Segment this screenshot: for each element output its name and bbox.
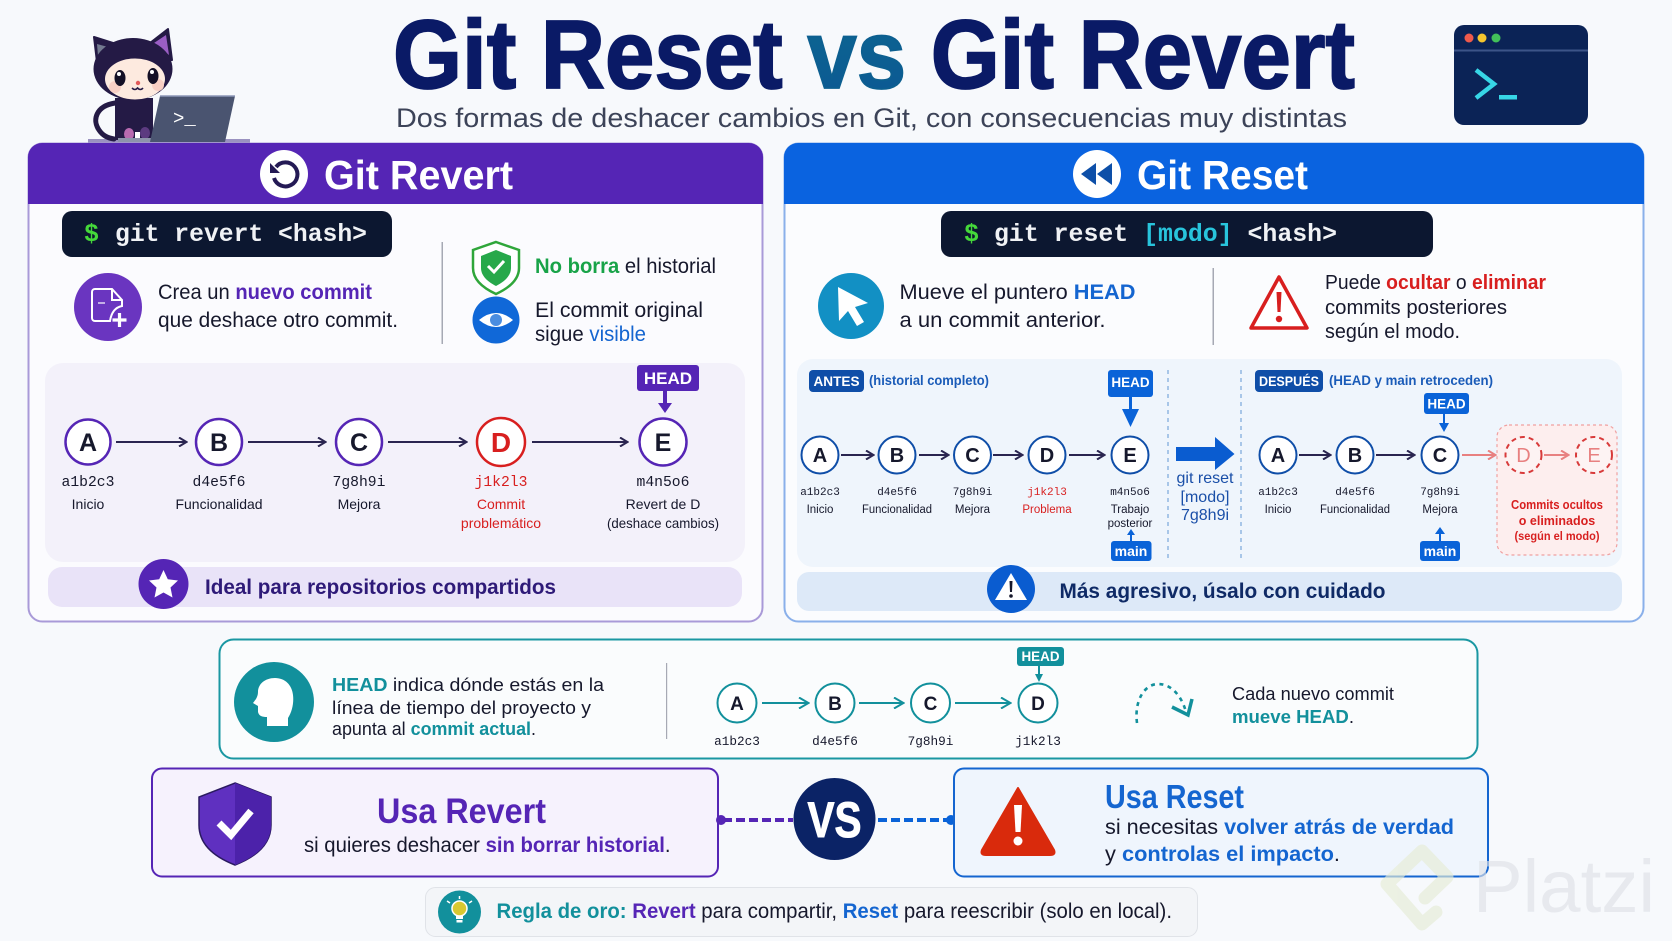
pointer: main before: main bbox=[1115, 543, 1147, 559]
commit A: a1b2c3 bbox=[62, 475, 114, 491]
commit C: C bbox=[350, 429, 368, 457]
callout: mas agresivo: Más agresivo, úsalo con cuidado bbox=[1060, 580, 1386, 603]
commit A before: Inicio bbox=[807, 504, 833, 516]
commit B after: Funcionalidad bbox=[1320, 504, 1390, 516]
label: despues: DESPUÉS bbox=[1259, 373, 1319, 389]
text: nuevo commit bbox=[158, 280, 398, 332]
pointer: HEAD after: HEAD bbox=[1427, 396, 1466, 412]
commit D: j1k2l3 bbox=[1015, 734, 1061, 749]
commit A: Inicio bbox=[72, 496, 105, 512]
connector: versus: VS bbox=[808, 792, 862, 848]
commit A after: A bbox=[1271, 445, 1285, 467]
commit C before: Mejora bbox=[955, 504, 991, 516]
callout: ideal para repositorios compartidos: Ideal para repositorios compartidos bbox=[205, 576, 556, 599]
commit C: C bbox=[924, 694, 938, 715]
label: despues bbox=[1255, 370, 1493, 392]
panel: hidden commits bbox=[1497, 425, 1617, 555]
commit E: m4n5o6 bbox=[637, 475, 689, 491]
commit D: D bbox=[1031, 694, 1045, 715]
commit B: d4e5f6 bbox=[812, 734, 858, 749]
label: antes: ANTES bbox=[814, 373, 860, 389]
text: HEAD definition: HEAD indica dónde estás en la bbox=[332, 674, 605, 695]
icon: terminal window bbox=[1454, 25, 1588, 125]
text: ocultar o eliminar bbox=[1325, 271, 1546, 343]
watermark: Platzi bbox=[1387, 845, 1655, 928]
text: volver atras: si necesitas volver atrás de verdad bbox=[1105, 816, 1454, 839]
pointer: main after bbox=[1420, 527, 1460, 561]
commit E before: Trabajo bbox=[1111, 504, 1149, 516]
text: HEAD definition: apunta al commit actual. bbox=[332, 718, 536, 739]
panel header: git revert: Git Revert bbox=[324, 152, 513, 198]
panel: usa revert bbox=[152, 768, 718, 876]
icon: green shield bbox=[473, 242, 519, 294]
icon: light bulb bbox=[438, 890, 481, 934]
icon: red warning bbox=[982, 788, 1054, 855]
pointer: HEAD before bbox=[1108, 370, 1153, 427]
timeline: reset before and after bbox=[797, 359, 1622, 567]
icon: new file bbox=[74, 273, 142, 341]
panel: git reset bbox=[784, 143, 1644, 622]
commit A before: A bbox=[813, 445, 827, 467]
commit E: Revert de D bbox=[626, 496, 700, 512]
pointer: HEAD bbox=[637, 365, 699, 413]
commit E before: m4n5o6 bbox=[1110, 487, 1150, 499]
commit C before: C bbox=[965, 445, 980, 467]
commit A: A bbox=[730, 694, 744, 715]
commit B after: d4e5f6 bbox=[1335, 487, 1375, 499]
text: cada nuevo commit bbox=[1232, 683, 1394, 727]
panel: HEAD explanation bbox=[220, 640, 1478, 758]
callout: regla de oro bbox=[426, 888, 1198, 936]
panel: hidden commits: D bbox=[1516, 445, 1531, 467]
text: mueve HEAD bbox=[900, 280, 1136, 332]
commit B after bbox=[1320, 436, 1390, 516]
commit C: Mejora bbox=[338, 496, 381, 512]
commit C after: 7g8h9i bbox=[1420, 487, 1460, 499]
callout: ideal para repositorios compartidos bbox=[48, 559, 742, 609]
icon: eye bbox=[472, 296, 520, 344]
arrow: git reset: git reset bbox=[1177, 470, 1234, 487]
commit C before: 7g8h9i bbox=[953, 487, 993, 499]
panel header: git reset bbox=[784, 143, 1644, 204]
commit C after: C bbox=[1433, 445, 1447, 467]
commit D before bbox=[1022, 436, 1072, 516]
commit B: d4e5f6 bbox=[193, 475, 245, 491]
commit D before: D bbox=[1040, 445, 1054, 467]
command: git revert: git revert <hash> bbox=[115, 220, 367, 249]
commit B: B bbox=[828, 694, 842, 715]
panel: hidden commits: o eliminados bbox=[1519, 514, 1595, 528]
connector: versus bbox=[716, 778, 956, 860]
pointer: HEAD: HEAD bbox=[1022, 648, 1060, 664]
panel: hidden commits: Commits ocultos bbox=[1511, 498, 1603, 512]
commit B: Funcionalidad bbox=[176, 496, 262, 512]
commit A before: a1b2c3 bbox=[800, 487, 840, 499]
pointer: main after: main bbox=[1424, 543, 1456, 559]
commit E before: posterior bbox=[1108, 518, 1153, 530]
commit B before: Funcionalidad bbox=[862, 504, 932, 516]
text: cada nuevo commit: Cada nuevo commit bbox=[1232, 683, 1394, 704]
commit C before bbox=[953, 436, 993, 516]
commit D bbox=[1015, 684, 1061, 749]
panel header: git revert bbox=[28, 143, 763, 204]
commit B before: d4e5f6 bbox=[877, 487, 917, 499]
label: antes bbox=[809, 370, 989, 392]
arrow: git reset bbox=[1176, 437, 1234, 524]
timeline: HEAD moves bbox=[714, 647, 1064, 749]
command: git revert bbox=[62, 211, 392, 257]
panel header: git reset: Git Reset bbox=[1137, 152, 1308, 198]
label: antes: (historial completo) bbox=[869, 373, 989, 388]
pointer: HEAD after bbox=[1424, 393, 1469, 432]
commit C bbox=[333, 419, 386, 512]
commit A before bbox=[800, 436, 840, 516]
callout: regla de oro: Regla de oro: Revert para compartir, Reset para reescribir (solo en local). bbox=[496, 899, 1172, 923]
icon: dashed arc arrow bbox=[1137, 684, 1192, 723]
icon: head profile bbox=[234, 662, 314, 742]
title: Git Reset vs Git Revert bbox=[393, 0, 1355, 109]
pointer: main before bbox=[1111, 529, 1152, 561]
panel: hidden commits: E bbox=[1587, 445, 1601, 467]
text: ocultar o eliminar: Puede ocultar o eliminar bbox=[1325, 271, 1546, 294]
icon: warning triangle bbox=[1251, 277, 1307, 328]
pointer: HEAD bbox=[1017, 647, 1064, 682]
text: commit visible bbox=[535, 299, 703, 346]
callout: mas agresivo bbox=[797, 565, 1622, 613]
commit E: (deshace cambios) bbox=[607, 515, 719, 531]
commit D before: Problema bbox=[1022, 504, 1072, 516]
text: commit visible: El commit original bbox=[535, 299, 703, 322]
commit B before: B bbox=[890, 445, 904, 467]
commit C after: Mejora bbox=[1422, 504, 1458, 516]
commit C: 7g8h9i bbox=[333, 475, 386, 491]
commit C bbox=[908, 684, 953, 749]
text: volver atras: y controlas el impacto . bbox=[1105, 843, 1340, 866]
text: nuevo commit: Crea un nuevo commit bbox=[158, 280, 372, 304]
commit E before: E bbox=[1123, 445, 1137, 467]
subtitle: Dos formas de deshacer cambios en Git, con consecuencias muy distintas bbox=[396, 103, 1347, 133]
panel: git revert bbox=[28, 143, 763, 622]
commit B after: B bbox=[1348, 445, 1362, 467]
icon: purple shield bbox=[199, 783, 271, 865]
commit C after bbox=[1420, 436, 1460, 516]
timeline: revert history bbox=[45, 363, 745, 562]
commit D: D bbox=[491, 427, 511, 458]
pointer: HEAD before: HEAD bbox=[1111, 375, 1150, 390]
icon: cursor bbox=[818, 273, 884, 339]
watermark: Platzi: Platzi bbox=[1473, 845, 1655, 928]
text: sin borrar historial: si quieres deshacer sin borrar historial. bbox=[304, 834, 670, 857]
text: nuevo commit: que deshace otro commit. bbox=[158, 308, 398, 332]
icon: cat mascot with laptop: >_ bbox=[173, 108, 196, 130]
arrow: git reset: [modo] bbox=[1181, 489, 1229, 506]
command: git revert: $ bbox=[84, 220, 99, 249]
commit D: j1k2l3 bbox=[475, 475, 527, 491]
icon: cat mascot with laptop bbox=[88, 29, 250, 143]
text: mueve HEAD: a un commit anterior. bbox=[900, 308, 1106, 332]
text: cada nuevo commit: mueve HEAD. bbox=[1232, 706, 1354, 727]
commit B before bbox=[862, 436, 932, 516]
commit A: A bbox=[79, 429, 97, 457]
text: ocultar o eliminar: commits posteriores bbox=[1325, 296, 1507, 319]
commit A after bbox=[1258, 436, 1298, 516]
commit B: B bbox=[210, 429, 228, 457]
commit E bbox=[607, 418, 719, 531]
text: HEAD definition: línea de tiempo del proyecto y bbox=[332, 697, 592, 718]
commit E: E bbox=[655, 429, 671, 457]
commit D: problemático bbox=[461, 515, 541, 531]
commit A after: a1b2c3 bbox=[1258, 487, 1298, 499]
commit A bbox=[714, 684, 760, 749]
commit B bbox=[812, 684, 858, 749]
text: mueve HEAD: Mueve el puntero HEAD bbox=[900, 280, 1136, 304]
text: commit visible: sigue visible bbox=[535, 323, 646, 346]
commit E before bbox=[1108, 436, 1153, 530]
text: HEAD definition bbox=[332, 674, 605, 739]
label: despues: (HEAD y main retroceden) bbox=[1329, 373, 1493, 388]
text: ocultar o eliminar: según el modo. bbox=[1325, 320, 1460, 343]
pointer: HEAD: HEAD bbox=[644, 369, 692, 388]
command: git reset bbox=[941, 211, 1433, 257]
panel: hidden commits: (según el modo) bbox=[1514, 529, 1600, 543]
arrow: git reset: 7g8h9i bbox=[1181, 507, 1229, 524]
commit D bbox=[461, 418, 541, 531]
panel: usa reset: Usa Reset bbox=[1105, 778, 1244, 815]
commit C: 7g8h9i bbox=[908, 734, 953, 749]
commit A after: Inicio bbox=[1265, 504, 1291, 516]
command: git reset: $ bbox=[964, 220, 979, 249]
panel: usa reset bbox=[954, 768, 1488, 876]
text: no borra: No borra el historial bbox=[535, 255, 716, 278]
panel: usa revert: Usa Revert bbox=[377, 792, 546, 831]
commit A bbox=[62, 420, 114, 512]
text: volver atras bbox=[1105, 816, 1454, 866]
commit B bbox=[176, 419, 262, 512]
command: git reset: git reset [modo] <hash> bbox=[994, 220, 1337, 249]
commit D: Commit bbox=[477, 496, 525, 512]
commit A: a1b2c3 bbox=[714, 734, 760, 749]
commit D before: j1k2l3 bbox=[1027, 487, 1067, 499]
